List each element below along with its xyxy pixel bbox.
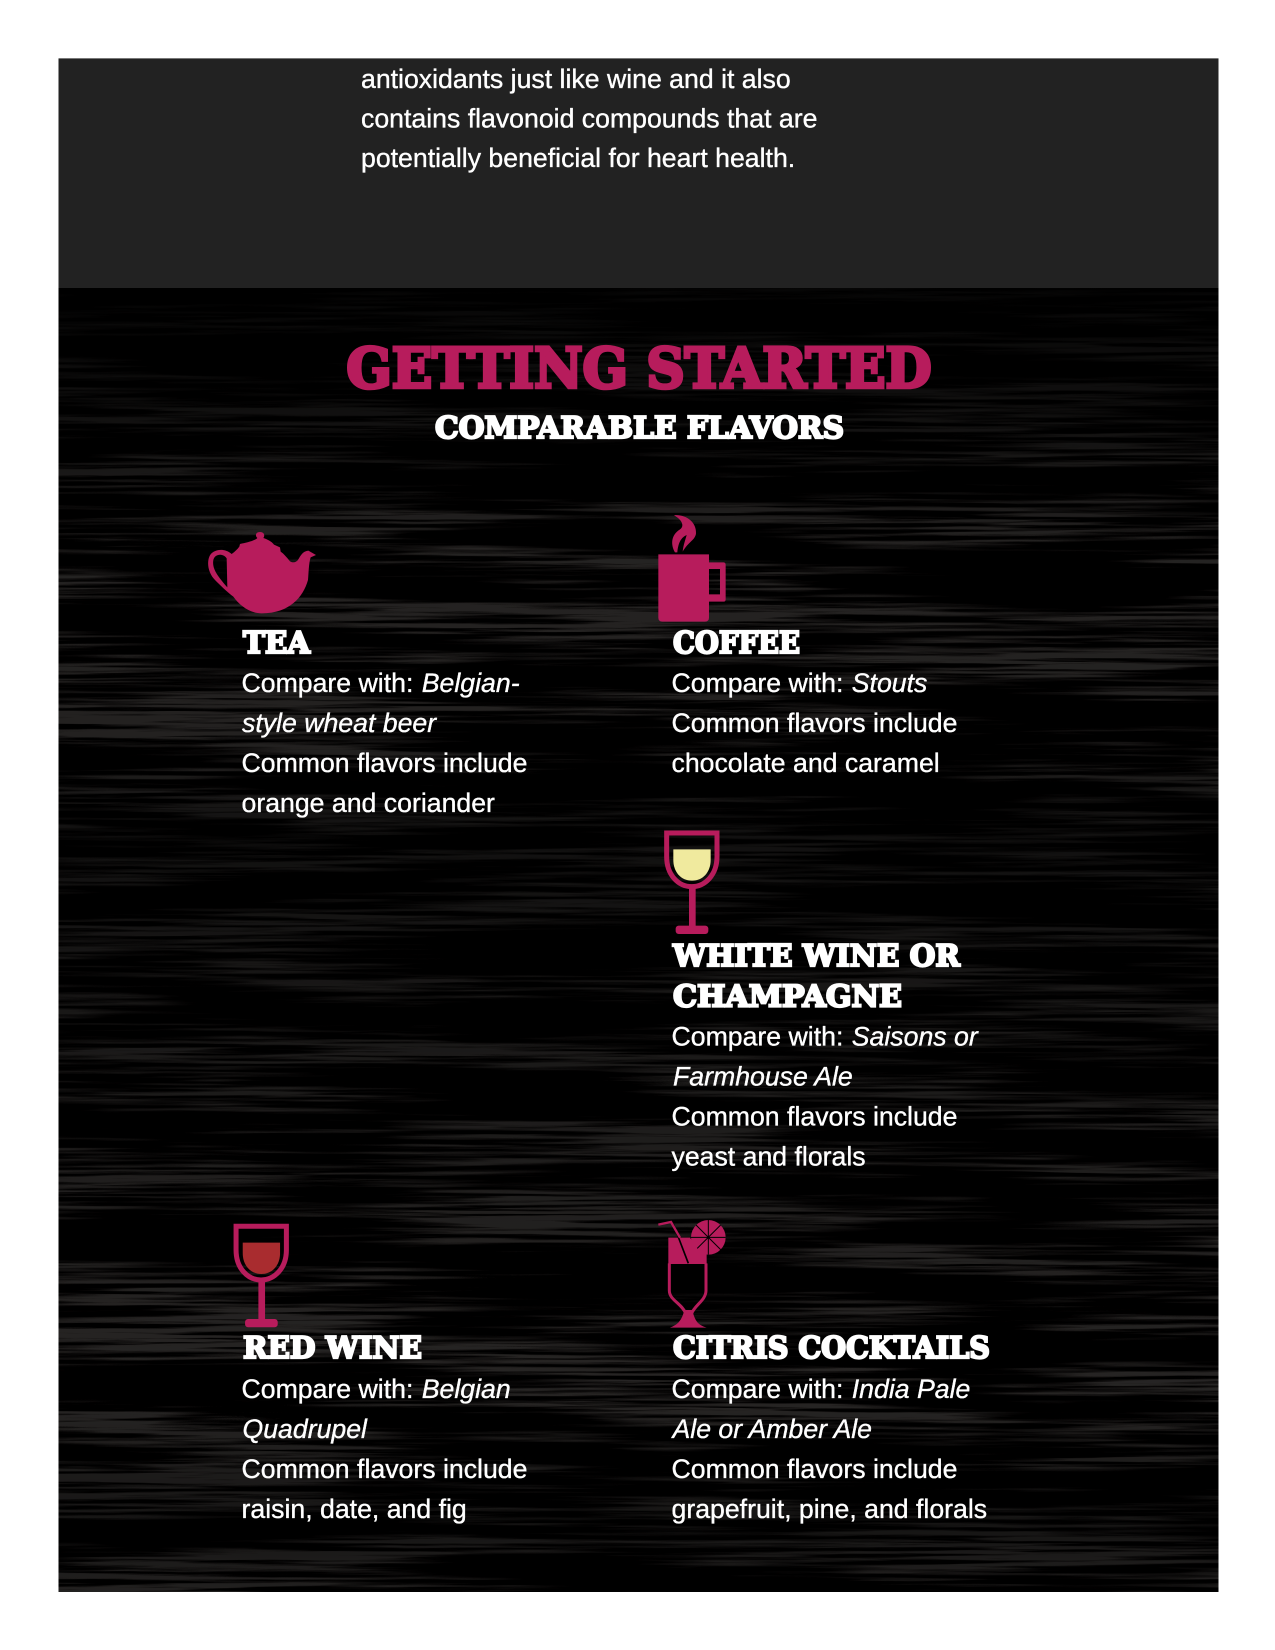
heading: white wine or champagne: WHITE WINE OR bbox=[672, 939, 961, 974]
item: citrus cocktails bbox=[658, 1220, 990, 1524]
text: red wine details: Compare with: bbox=[242, 1374, 421, 1404]
text block: intro paragraph end: contains flavonoid compounds that are bbox=[361, 104, 817, 134]
text: tea details: Belgian- bbox=[422, 668, 520, 698]
heading: tea: TEA bbox=[243, 626, 311, 661]
text: cocktail details: grapefruit, pine, and florals bbox=[672, 1494, 987, 1524]
icon: cocktail glass bbox=[658, 1220, 726, 1328]
panel: upper intro section bbox=[58, 58, 1218, 288]
text: red wine details: Belgian bbox=[422, 1374, 511, 1404]
text: coffee details: Stouts bbox=[852, 668, 927, 698]
text block: intro paragraph end: antioxidants just like wine and it also bbox=[361, 64, 791, 94]
text: white wine details: Common flavors include bbox=[672, 1102, 957, 1132]
heading: red wine: RED WINE bbox=[243, 1331, 422, 1366]
icon: white wine glass bbox=[667, 833, 717, 934]
text: tea details: orange and coriander bbox=[242, 788, 495, 818]
text: cocktail details: India Pale bbox=[852, 1374, 970, 1404]
text: white wine details: Saisons or bbox=[852, 1022, 979, 1052]
text: red wine details: Quadrupel bbox=[242, 1414, 368, 1444]
item: tea bbox=[208, 532, 527, 818]
text: cocktail details: Compare with: bbox=[672, 1374, 851, 1404]
text: red wine details: raisin, date, and fig bbox=[242, 1494, 467, 1524]
item: red wine bbox=[236, 1226, 527, 1524]
text: red wine details: Common flavors include bbox=[242, 1454, 527, 1484]
icon: coffee mug bbox=[658, 515, 726, 622]
text: coffee details: Compare with: bbox=[672, 668, 851, 698]
heading: citris cocktails: CITRIS COCKTAILS bbox=[673, 1331, 990, 1366]
heading: coffee: COFFEE bbox=[673, 626, 800, 661]
text: white wine details: yeast and florals bbox=[672, 1142, 866, 1172]
text: tea details: Compare with: bbox=[242, 668, 421, 698]
icon: red wine glass bbox=[236, 1226, 286, 1327]
text: cocktail details: Ale or Amber Ale bbox=[670, 1414, 872, 1444]
text: tea details: Common flavors include bbox=[242, 748, 527, 778]
text: white wine details: Farmhouse Ale bbox=[673, 1062, 853, 1092]
panel: dark wood background bbox=[58, 288, 1218, 1592]
text: coffee details: Common flavors include bbox=[672, 708, 957, 738]
heading: white wine or champagne: CHAMPAGNE bbox=[673, 980, 902, 1014]
text: white wine details: Compare with: bbox=[672, 1022, 851, 1052]
text block: intro paragraph end: potentially beneficial for heart health. bbox=[361, 143, 795, 173]
item: white wine bbox=[667, 833, 979, 1172]
text: cocktail details: Common flavors include bbox=[672, 1454, 957, 1484]
item: coffee bbox=[658, 515, 957, 778]
text: tea details: style wheat beer bbox=[242, 708, 437, 738]
subtitle: COMPARABLE FLAVORS bbox=[435, 411, 844, 446]
icon: teapot bbox=[208, 532, 316, 613]
title: GETTING STARTED bbox=[346, 336, 932, 400]
text: coffee details: chocolate and caramel bbox=[672, 748, 940, 778]
